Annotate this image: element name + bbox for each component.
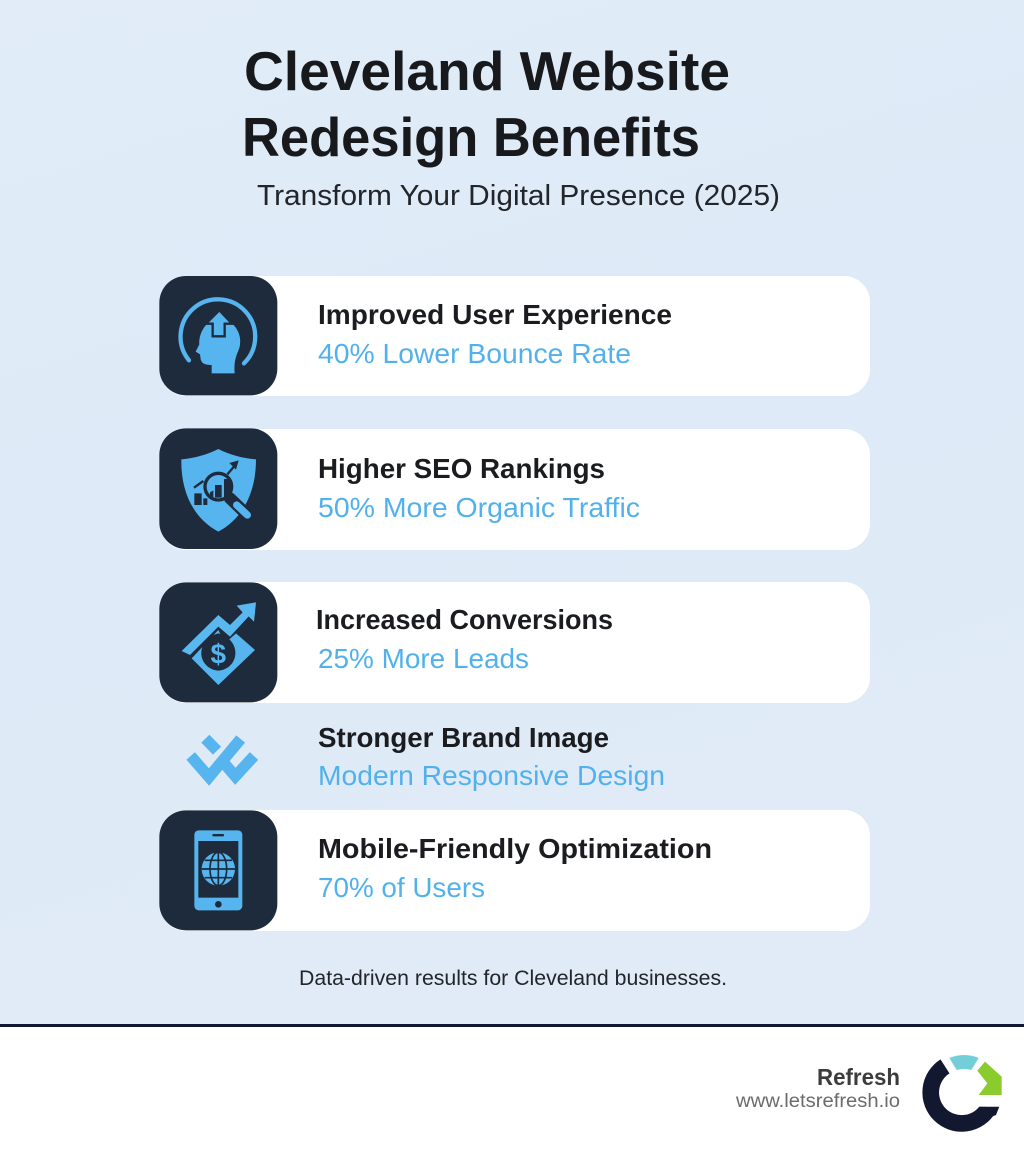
icon: money with rising arrow: $	[211, 639, 227, 670]
heading: Mobile-Friendly Optimization	[318, 833, 712, 864]
panel: increased conversions	[159, 582, 870, 703]
heading: Improved User Experience	[318, 299, 672, 330]
panel: improved user experience	[159, 276, 870, 396]
heading: Stronger Brand Image	[318, 722, 609, 753]
card	[160, 582, 870, 703]
brand url: www.letsrefresh.io	[735, 1091, 900, 1112]
icon: head with up arrow	[159, 276, 277, 395]
subtitle: Transform Your Digital Presence (2025)	[257, 180, 780, 212]
metric: Modern Responsive Design	[318, 760, 665, 791]
title: Cleveland Website	[244, 40, 730, 102]
panel: mobile-friendly optimization	[159, 810, 870, 931]
icon: refresh logo	[931, 1055, 1003, 1123]
metric: 25% More Leads	[318, 643, 529, 674]
footnote: Data-driven results for Cleveland businesses.	[299, 967, 727, 990]
footer divider	[0, 1024, 1024, 1027]
title: Redesign Benefits	[242, 106, 700, 168]
card	[160, 276, 870, 396]
icon: check mark W logo	[191, 739, 254, 777]
heading: Increased Conversions	[316, 604, 613, 635]
metric: 40% Lower Bounce Rate	[318, 338, 631, 369]
heading: Higher SEO Rankings	[318, 453, 605, 484]
panel: higher seo rankings	[159, 428, 870, 550]
metric: 70% of Users	[318, 872, 485, 903]
icon: money with rising arrow	[159, 582, 277, 702]
footer brand	[735, 1055, 1003, 1123]
card	[160, 429, 870, 550]
card	[160, 810, 870, 931]
panel: stronger brand image	[191, 722, 665, 791]
metric: 50% More Organic Traffic	[318, 492, 640, 523]
icon: shield with magnifier and chart	[159, 428, 277, 549]
brand name: Refresh	[817, 1064, 900, 1090]
icon: phone with globe	[159, 810, 277, 930]
title	[242, 40, 730, 168]
